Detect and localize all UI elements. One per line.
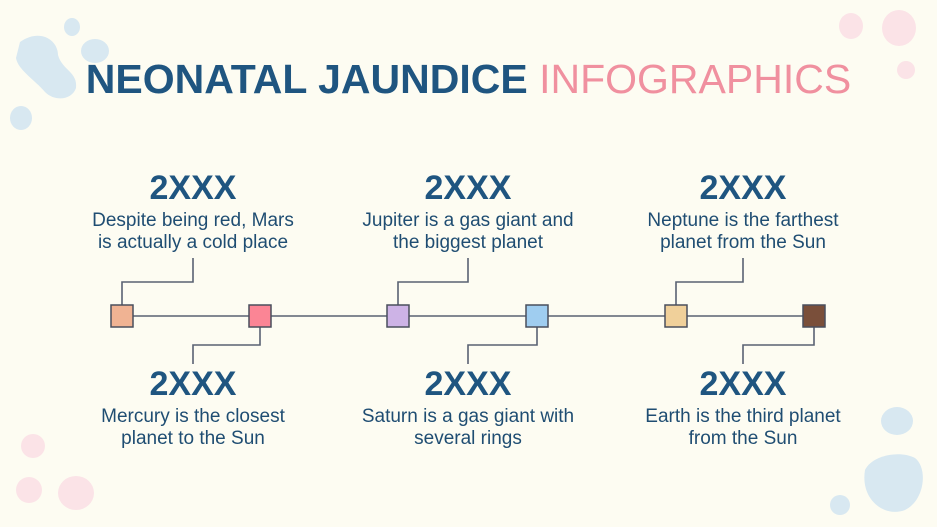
milestone 5	[647, 169, 839, 253]
milestone 5: Neptune is the farthest	[647, 210, 839, 231]
milestone 6	[645, 365, 841, 449]
title: NEONATAL JAUNDICE INFOGRAPHICS	[86, 56, 851, 102]
milestone 4	[362, 365, 574, 449]
milestone 2: 2XXX	[150, 365, 236, 403]
milestone 3: the biggest planet	[393, 232, 543, 253]
milestone 1	[92, 169, 294, 253]
milestone 4: 2XXX	[425, 365, 511, 403]
milestone 5: 2XXX	[700, 169, 786, 207]
milestone 3	[362, 169, 574, 253]
milestone 1: is actually a cold place	[98, 232, 288, 253]
milestone 6: Earth is the third planet	[645, 406, 841, 427]
milestone 6: from the Sun	[689, 428, 797, 449]
milestone 1: 2XXX	[150, 169, 236, 207]
milestone 2: Mercury is the closest	[101, 406, 285, 427]
milestone 4: several rings	[414, 428, 522, 449]
milestone 3: 2XXX	[425, 169, 511, 207]
milestone 6: 2XXX	[700, 365, 786, 403]
milestone 5: planet from the Sun	[660, 232, 826, 253]
milestone 2: planet to the Sun	[121, 428, 265, 449]
milestone 2	[101, 365, 285, 449]
milestone 3: Jupiter is a gas giant and	[362, 210, 574, 231]
milestone 1: Despite being red, Mars	[92, 210, 294, 231]
milestone 4: Saturn is a gas giant with	[362, 406, 574, 427]
